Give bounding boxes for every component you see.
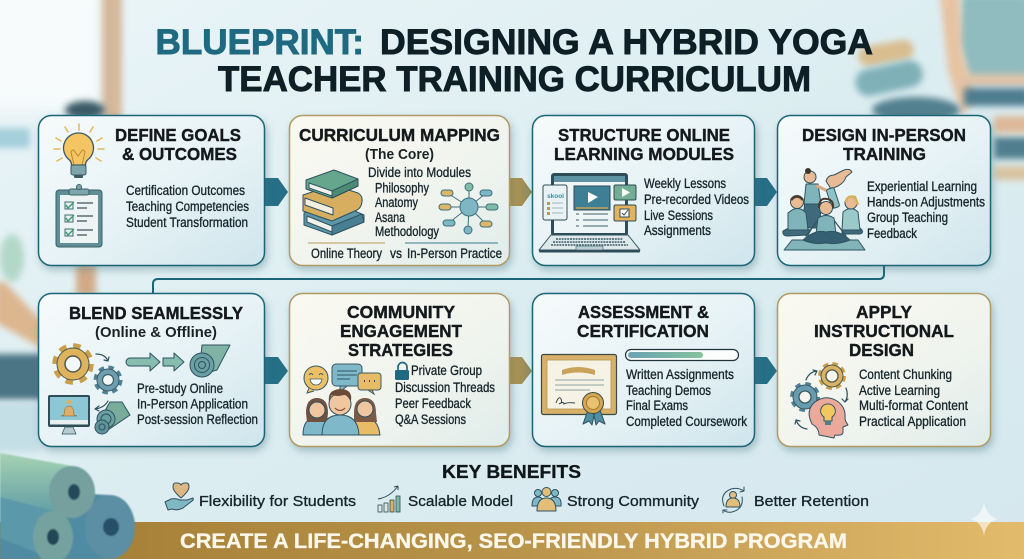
benefit: retention <box>723 487 869 513</box>
heading: define goals <box>115 125 241 164</box>
list: in-person: Feedback <box>867 226 917 241</box>
list: instructional: Active Learning <box>859 383 940 398</box>
list: community: Peer Feedback <box>395 396 471 411</box>
heading: instructional design <box>814 302 954 360</box>
heading: define goals: DEFINE GOALS <box>115 125 241 145</box>
list: instructional: Multi-format Content <box>859 398 968 413</box>
benefit: retention: Better Retention <box>754 493 869 510</box>
benefit: flexibility <box>165 483 356 510</box>
icon: yoga group <box>783 168 865 250</box>
heading: assessment <box>577 302 709 341</box>
list: blend: Post-session Reflection <box>137 412 258 427</box>
list: blend <box>137 381 258 427</box>
list: assessment <box>626 367 747 429</box>
panel: online modules <box>532 116 754 266</box>
banner text: CREATE A LIFE-CHANGING, SEO-FRIENDLY HYBRID PROGRAM <box>180 530 847 553</box>
panel: community engagement <box>290 294 510 446</box>
title: BLUEPRINT: <box>156 23 364 62</box>
list: community: Discussion Threads <box>395 380 495 395</box>
list: blend: In-Person Application <box>137 396 248 412</box>
icon: certificate <box>542 354 616 425</box>
list: modules <box>368 165 471 239</box>
arrow: community to assessment <box>510 357 532 384</box>
icon: clipboard checklist <box>56 184 102 247</box>
list: instructional: Content Chunking <box>859 367 952 382</box>
panel: define goals <box>38 116 264 266</box>
heading: community engagement: STRATEGIES <box>348 340 453 360</box>
list: assessment: Final Exams <box>626 398 688 413</box>
list: community: Q&A Sessions <box>395 412 466 427</box>
heading: online modules: LEARNING MODULES <box>554 144 734 164</box>
benefit: scalable: Scalable Model <box>408 493 513 510</box>
sparkle star <box>970 502 998 536</box>
list: assessment: Completed Coursework <box>626 414 747 429</box>
panel: curriculum mapping <box>290 116 510 266</box>
bottom banner <box>0 522 1024 559</box>
list: in-person <box>867 179 985 241</box>
list: modules: Anatomy <box>375 195 418 210</box>
benefit: flexibility: Flexibility for Students <box>199 493 356 510</box>
online vs in-person comparison: In-Person Practice <box>407 246 502 261</box>
heading: instructional design: INSTRUCTIONAL <box>814 321 954 341</box>
icon: laptop with lessons: skool <box>547 193 564 200</box>
icon: gears and head <box>793 365 848 438</box>
list: assessment: Written Assignments <box>626 367 734 382</box>
arrow: mapping to online <box>510 178 532 206</box>
online vs in-person comparison: vs <box>390 246 402 261</box>
list: modules: Methodology <box>375 224 439 239</box>
panel: instructional design <box>778 294 990 446</box>
benefit: community <box>532 488 700 511</box>
heading: assessment: CERTIFICATION <box>577 321 709 341</box>
heading: curriculum mapping <box>299 125 500 163</box>
icon: person in cycle <box>723 487 744 513</box>
heading: in-person training: DESIGN IN-PERSON <box>802 125 966 145</box>
online vs in-person comparison: Online Theory <box>311 246 382 261</box>
list: blend: Pre-study Online <box>137 381 223 396</box>
heading: online modules: STRUCTURE ONLINE <box>558 125 730 145</box>
title <box>156 23 873 99</box>
icon: rolled mat <box>95 402 130 434</box>
benefit: community: Strong Community <box>567 493 700 510</box>
list: outcomes: Student Transformation <box>126 215 248 230</box>
list: community: Private Group <box>411 363 482 378</box>
icon: stack of books <box>303 170 364 235</box>
heading: blend seamlessly <box>69 303 243 341</box>
heading: online modules <box>554 125 734 164</box>
heading: instructional design: APPLY <box>856 302 912 322</box>
heading: curriculum mapping: CURRICULUM MAPPING <box>299 125 500 145</box>
list: assessment: Teaching Demos <box>626 383 711 398</box>
icon: growth chart <box>378 486 400 512</box>
list: in-person: Group Teaching <box>867 210 948 225</box>
heading: instructional design: DESIGN <box>849 340 914 360</box>
icon: three people <box>532 488 561 511</box>
heading: community engagement <box>340 302 462 360</box>
list: modules: Philosophy <box>375 180 429 196</box>
heading: blend seamlessly: BLEND SEAMLESSLY <box>69 303 243 323</box>
connector line <box>153 266 884 293</box>
list: online: Weekly Lessons <box>644 176 726 191</box>
arrow: assessment to instructional design <box>755 357 777 384</box>
list: outcomes: Certification Outcomes <box>126 183 245 198</box>
icon: module network <box>439 183 498 234</box>
list: in-person: Experiential Learning <box>867 179 977 194</box>
online vs in-person comparison <box>311 246 502 261</box>
list: online: Assignments <box>644 223 711 238</box>
list: modules: Asana <box>375 210 405 225</box>
heading: community engagement: ENGAGEMENT <box>340 321 462 341</box>
heading: assessment: ASSESSMENT & <box>578 302 709 322</box>
icon: monitor with yoga figure <box>48 395 90 434</box>
list: in-person: Hands-on Adjustments <box>867 194 985 210</box>
list: outcomes: Teaching Competencies <box>126 199 249 214</box>
arrow: online to in-person <box>755 178 777 206</box>
panel: blend seamlessly <box>38 294 264 446</box>
heading: in-person training <box>802 125 966 164</box>
arrow: goals to mapping <box>265 178 288 206</box>
icon: padlock <box>395 362 409 380</box>
heading: in-person training: TRAINING <box>843 144 926 164</box>
key benefits heading: KEY BENEFITS <box>442 462 581 482</box>
list: instructional <box>859 367 968 429</box>
list: online: Live Sessions <box>644 208 713 223</box>
icon: hand with heart <box>165 483 193 510</box>
heading: define goals: & OUTCOMES <box>122 144 237 164</box>
list: outcomes <box>126 183 249 230</box>
heading: community engagement: COMMUNITY <box>347 302 455 322</box>
yoga mats <box>0 453 135 559</box>
icon: laptop with lessons <box>539 173 640 252</box>
arrow: blend to community <box>265 357 288 384</box>
list: community <box>395 363 495 427</box>
icon: light bulb <box>54 124 104 178</box>
icon: community people and chat <box>303 364 381 435</box>
list: online: Pre-recorded Videos <box>644 192 749 207</box>
progress bar <box>626 350 738 360</box>
panel: in-person training <box>778 116 990 266</box>
benefit: scalable <box>378 486 513 512</box>
title: TEACHER TRAINING CURRICULUM <box>218 60 811 99</box>
panel: assessment <box>532 294 754 446</box>
icon: arrows to mat <box>126 345 230 377</box>
list: modules: Divide into Modules <box>368 165 471 180</box>
list: instructional: Practical Application <box>859 414 966 429</box>
title: DESIGNING A HYBRID YOGA <box>380 23 873 62</box>
icon: gears <box>56 347 120 411</box>
heading: curriculum mapping: (The Core) <box>365 146 434 163</box>
heading: blend seamlessly: (Online & Offline) <box>95 324 217 341</box>
list: online <box>644 176 749 238</box>
